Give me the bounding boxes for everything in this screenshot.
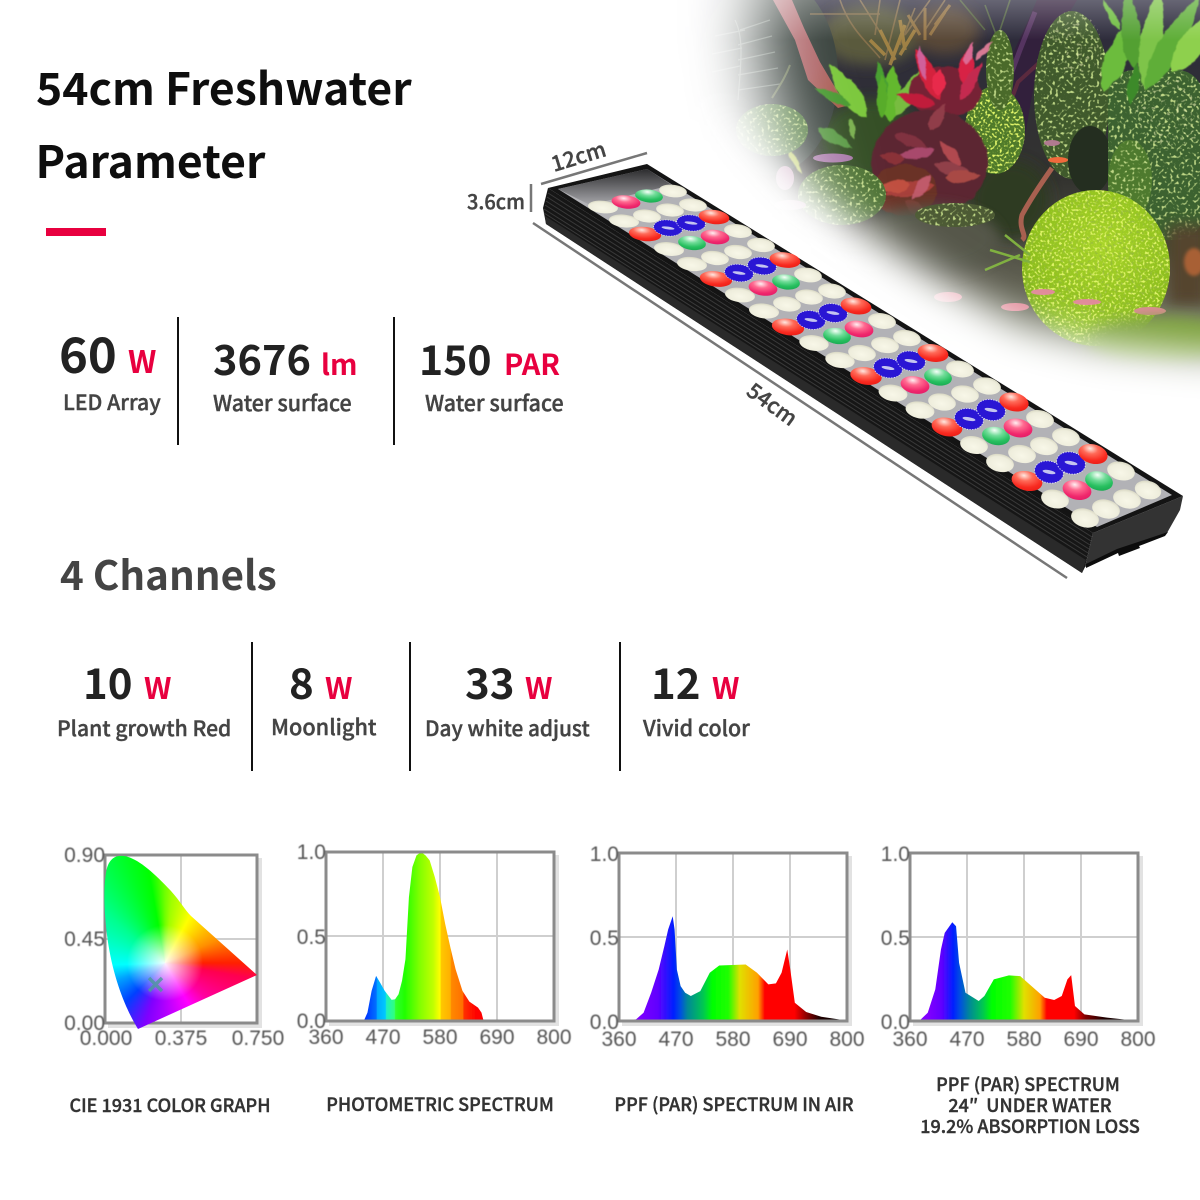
axis labels: 0.45 (64, 928, 105, 951)
chart: PPF spectrum in air: 1.0 (590, 843, 619, 866)
dimension: 12cm (541, 133, 647, 184)
chart: photometric spectrum: 690 (479, 1026, 515, 1049)
stat: 60 W LED Array: 60 (59, 317, 117, 388)
top haze (727, 0, 1200, 34)
stat: 150 PAR Water surface: Water surface (425, 387, 564, 418)
lamp end cap (1085, 496, 1183, 568)
chart: PPF spectrum in air (590, 843, 865, 1051)
axis labels (64, 844, 284, 1050)
photo backdrop (705, 0, 1200, 382)
stat: 150 PAR Water surface: PAR (504, 342, 560, 384)
LED lamp (543, 164, 1183, 573)
stat: 3676 lm Water surface: 3676 (213, 327, 311, 387)
channel: Day white adjust: W (525, 664, 552, 708)
lamp side with fins (543, 188, 1093, 573)
dimension: 3.6cm: 3.6cm (467, 186, 525, 215)
channel: Day white adjust (425, 651, 590, 742)
chart: CIE 1931 color graph (64, 844, 284, 1050)
lacy green plant (736, 104, 808, 156)
dimension: 54cm (533, 223, 1067, 578)
LED panel (558, 169, 1172, 527)
left broad leaves (788, 61, 920, 174)
frame and grid (105, 855, 260, 1026)
tetra fish (774, 140, 1166, 315)
dark fern on left (720, 0, 838, 164)
caption: CIE 1931 color graph: CIE 1931 COLOR GRAPH (69, 1092, 271, 1118)
backdrop foliage washes (820, 5, 1200, 270)
channel: Vivid color: Vivid color (642, 712, 750, 743)
right bush (1108, 70, 1200, 305)
channel: Plant growth Red: Plant growth Red (57, 713, 231, 743)
spectrum curve (910, 922, 1138, 1021)
channel: Vivid color (642, 651, 750, 743)
chart: photometric spectrum: 580 (422, 1026, 458, 1049)
channel: Plant growth Red (57, 651, 231, 743)
chart: PPF spectrum in air: 360 (601, 1028, 637, 1051)
axis labels: 0.00 (64, 1012, 105, 1035)
spectrum curve (619, 916, 847, 1021)
channel: Day white adjust: Day white adjust (425, 712, 590, 742)
stat: 150 PAR Water surface (419, 327, 564, 418)
moss mound (798, 165, 1003, 248)
spectrum curve (352, 852, 492, 1021)
caption: PPF spectrum under water: 24″ UNDER WATER (948, 1092, 1112, 1118)
chart: photometric spectrum: 1.0 (297, 841, 326, 864)
chart: PPF spectrum under water: 580 (1006, 1028, 1042, 1051)
LED array (587, 183, 1162, 530)
accent bar (46, 228, 106, 236)
lamp top rim (548, 164, 1183, 533)
chart: photometric spectrum: 470 (365, 1026, 401, 1049)
caption: PPF spectrum under water: PPF (PAR) SPECTRUM (936, 1071, 1120, 1097)
chart: PPF spectrum under water: 470 (949, 1028, 985, 1051)
chart: PPF spectrum in air: 800 (829, 1028, 865, 1051)
stat: 150 PAR Water surface: 150 (419, 327, 492, 387)
channel: Plant growth Red: W (144, 664, 171, 708)
channel: Vivid color: W (712, 664, 739, 708)
chart: PPF spectrum under water: 360 (892, 1028, 928, 1051)
title: Parameter (36, 126, 266, 191)
chart: PPF spectrum in air: 690 (772, 1028, 808, 1051)
stat: 3676 lm Water surface (213, 327, 357, 418)
axis labels: 0.750 (232, 1027, 284, 1050)
pink driftwood root (773, 0, 846, 108)
chart: PPF spectrum in air: 470 (658, 1028, 694, 1051)
channel: Moonlight: 8 (289, 651, 314, 712)
thin stems at top (810, 0, 1010, 65)
stat: 60 W LED Array (59, 317, 161, 417)
title (36, 53, 412, 191)
aquarium photo (705, 0, 1200, 382)
red plant (895, 39, 996, 118)
moss dome (985, 168, 1170, 346)
dimension: 54cm: 54cm (741, 375, 804, 433)
chart: PPF spectrum under water: 800 (1120, 1028, 1156, 1051)
CIE gamut (104, 856, 257, 1029)
title: 54cm Freshwater (36, 53, 412, 118)
maroon plant (870, 104, 989, 215)
channel: Vivid color: 12 (651, 651, 701, 712)
stat: 3676 lm Water surface: Water surface (213, 387, 352, 418)
dark trunk (1012, 3, 1075, 134)
channel: Moonlight: Moonlight (271, 711, 377, 742)
heading: 4 Channels: 4 Channels (60, 543, 277, 602)
channel: Moonlight: W (325, 664, 352, 708)
chart: photometric spectrum: 0.5 (297, 926, 326, 949)
caption: PPF spectrum under water: 19.2% ABSORPTION LOSS (920, 1113, 1140, 1139)
lime sprigs (965, 30, 1025, 174)
stat: 60 W LED Array: LED Array (63, 386, 161, 417)
chart: PPF spectrum in air: 0.0 (590, 1011, 619, 1034)
channel: Moonlight (271, 651, 377, 742)
chart: PPF spectrum in air: 0.5 (590, 927, 619, 950)
axis labels: 0.000 (80, 1027, 132, 1050)
chart: photometric spectrum: 360 (308, 1026, 344, 1049)
chart: PPF spectrum under water: 690 (1063, 1028, 1099, 1051)
channel: Plant growth Red: 10 (83, 651, 133, 712)
chart: PPF spectrum in air: 580 (715, 1028, 751, 1051)
stat: 60 W LED Array: W (128, 337, 156, 382)
caption: PPF spectrum in air: PPF (PAR) SPECTRUM IN AIR (614, 1091, 854, 1117)
dimension: 12cm: 12cm (547, 133, 610, 179)
java fern leaves (1093, 0, 1200, 106)
chart: photometric spectrum: 0.0 (297, 1010, 326, 1033)
chart: PPF spectrum under water (881, 843, 1156, 1051)
channel: Day white adjust: 33 (465, 651, 515, 712)
chart: PPF spectrum under water: 0.5 (881, 927, 910, 950)
chart: photometric spectrum (297, 841, 572, 1049)
chart: PPF spectrum under water: 1.0 (881, 843, 910, 866)
foreground grass (1085, 316, 1200, 364)
chart: photometric spectrum: 800 (536, 1026, 572, 1049)
axis labels: 0.375 (155, 1027, 207, 1050)
caption: photometric spectrum: PHOTOMETRIC SPECTRUM (326, 1091, 554, 1117)
white point marker (149, 978, 162, 991)
axis labels: 0.90 (64, 844, 105, 867)
tall green bush (1034, 11, 1112, 194)
panel far-end shading (558, 169, 672, 205)
chart: PPF spectrum under water: 0.0 (881, 1011, 910, 1034)
caption: PPF spectrum under water (920, 1071, 1140, 1139)
stat: 3676 lm Water surface: lm (321, 343, 357, 384)
